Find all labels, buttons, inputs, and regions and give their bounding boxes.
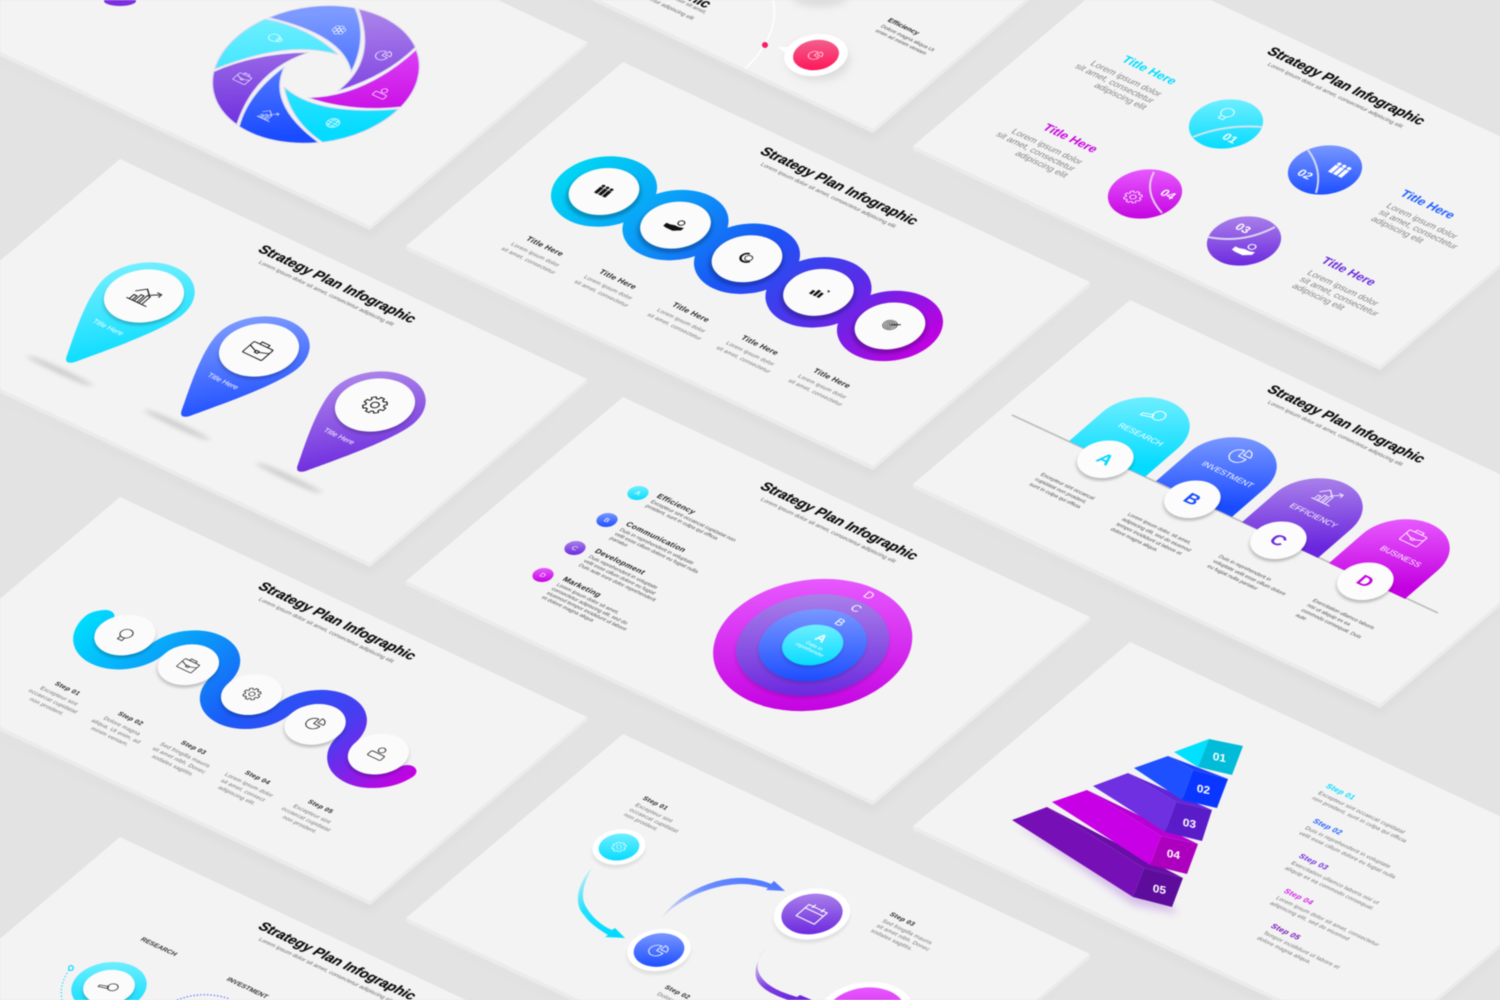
text: step 02: Duis in reprehenderit in voluptate <box>1303 826 1392 870</box>
text: D description: nisi ut aliquip ex ea <box>1305 603 1353 628</box>
panel: location pins slide (left) <box>0 159 587 573</box>
text: title 1: adipiscing elit <box>1092 81 1150 111</box>
text: step 05: non proident. <box>280 815 319 835</box>
text: column 2: Lorem ipsum dolor <box>582 275 634 301</box>
list dots <box>528 483 653 585</box>
text: step 03: Sed fringilla mauris <box>158 742 211 769</box>
text: title 4: Title Here <box>1039 122 1101 155</box>
arch D <box>1308 507 1470 617</box>
node 3 <box>755 879 869 953</box>
text: Efficiency: Dolore magna aliqua Ut <box>879 24 936 53</box>
pin 1: Title Here <box>90 317 126 337</box>
text: step 01: Excepteur sint occaecat cupidatat <box>1316 791 1406 835</box>
text: C description: voluptate velit esse cillum dolore <box>1211 559 1287 597</box>
text: step 02: Step 02 <box>116 711 145 727</box>
pyramid layer 01 <box>1174 739 1243 775</box>
text: step 01: Step 01 <box>1323 782 1358 801</box>
text: A description: cupidatat non proident, <box>1033 477 1088 505</box>
timeline curve <box>745 0 774 69</box>
ring labels: A <box>811 631 832 645</box>
text: step 02: minim veniam, <box>89 726 130 748</box>
text: step 04: Step 04 <box>243 770 272 786</box>
heading: Lorem ipsum dolor sit amet, consectetur adipiscing elit <box>758 162 897 229</box>
text: column 3: sit amet, consectetur <box>645 313 703 342</box>
text: column 3: Title Here <box>670 301 712 324</box>
arch B <box>1135 425 1297 535</box>
panel: aperture wheel slide (top left) <box>0 0 587 236</box>
node 4 <box>797 970 933 1000</box>
text: step 01: Excepteur sint <box>633 803 674 824</box>
pyramid layer 04 <box>1052 790 1198 874</box>
pin 2 <box>144 303 330 435</box>
circle 02: 02 <box>1294 167 1317 182</box>
text: Marketing: Lorem ipsum dolor sit amet, <box>554 583 621 616</box>
linked circle chain <box>529 143 965 375</box>
heading: Lorem ipsum dolor sit amet, consectetur adipiscing elit <box>1265 400 1404 467</box>
text: step 05: dolore magna aliqua. <box>1255 936 1313 965</box>
pin 2: Title Here <box>205 371 241 391</box>
pyramid layer 03: 03 <box>1182 817 1197 831</box>
panel: timeline slide (top centre) <box>406 0 1090 139</box>
circle 03: 03 <box>1232 221 1255 236</box>
text: title 2: Lorem ipsum dolor <box>1384 202 1460 241</box>
text: step 01: occaecat cupidatat <box>26 689 79 715</box>
aperture wheel chart <box>140 0 501 188</box>
text: B description: Lorem ipsum dolor, sit amet, <box>1125 512 1193 546</box>
panel: concentric circles slide (lower centre) <box>406 397 1090 811</box>
text: title 3: Title Here <box>1318 255 1380 288</box>
dotted arc: blue <box>177 995 230 1000</box>
label: investment: INVESTMENT <box>224 977 270 1000</box>
heading: Lorem ipsum dolor sit amet, consectetur adipiscing elit <box>1265 62 1404 129</box>
text: Communication: Communication <box>623 520 689 554</box>
text: step 03: Step 03 <box>887 912 917 927</box>
text: step 04: adipiscing elit. <box>216 786 257 807</box>
text: B description: tempor incididunt ut labore et <box>1114 522 1183 557</box>
text: title 1: Title Here <box>1118 54 1180 87</box>
heading: Strategy Plan Infographic <box>756 145 922 228</box>
text: step 01: Step 01 <box>53 681 82 697</box>
text: Development: Development <box>592 547 648 576</box>
text: title 3: sit amet, consectetur <box>1297 275 1382 318</box>
text: step 03: sit amet nibh. Donec <box>150 747 207 775</box>
pin shadows <box>25 354 324 495</box>
arrow 3 <box>756 942 812 1000</box>
arch D: D <box>1352 572 1379 591</box>
text: Development: Duis aute irure dolor reprehenderit <box>577 563 657 603</box>
text: title 2: adipiscing elit <box>1369 215 1427 245</box>
text: step 03: Sed fringilla mauris <box>880 919 933 946</box>
text: B description: dolore magna aliqua. <box>1109 527 1160 553</box>
text: Efficiency: Efficiency <box>885 18 921 36</box>
text: Marketing: eiusmod tempor incididunt ut labore <box>545 591 628 632</box>
dotted arc: cyan <box>61 966 73 1000</box>
circle 04: 04 <box>1157 187 1180 202</box>
heading: Lorem ipsum dolor sit amet, consectetur adipiscing elit <box>256 260 395 327</box>
text: step 04: Lorem ipsum dolor sit amet, consectetur <box>1274 896 1380 948</box>
text: Development: Duis reprehenderit in voluptate <box>586 555 659 590</box>
arch A: A <box>1092 450 1119 469</box>
arch A: RESEARCH <box>1116 421 1166 448</box>
text: step 04: Step 04 <box>1281 887 1316 906</box>
panel: pyramid slide (lower right) <box>913 642 1500 1000</box>
text: step 04: Lorem ipsum dolor <box>223 773 274 799</box>
pyramid layer 01: 01 <box>1212 751 1227 765</box>
heading: Lorem ipsum dolor sit amet, consectetur adipiscing elit <box>256 597 395 664</box>
text: step 04: adipiscing elit, sed do eiusmod <box>1268 901 1351 942</box>
pin 3: Title Here <box>321 426 357 446</box>
concentric circle chart <box>672 554 953 736</box>
panel: five linked circles slide (centre) <box>406 62 1090 476</box>
arch B: INVESTMENT <box>1199 459 1256 489</box>
text: title 3: Lorem ipsum dolor <box>1305 269 1381 308</box>
cropped white node <box>792 0 848 7</box>
text: column 4: Lorem ipsum dolor <box>724 341 776 367</box>
text: Communication: velit esse cillum dolore eu fugiat nulla <box>613 532 700 575</box>
ring labels: C <box>847 602 866 615</box>
list dots: B <box>601 517 611 524</box>
panel: research cycle slide (bottom left) <box>0 837 587 1000</box>
arch B: B <box>1179 490 1206 509</box>
heading <box>549 0 715 21</box>
text: title 4: adipiscing elit <box>1013 149 1071 179</box>
ring labels <box>793 589 879 659</box>
pyramid shadow <box>1016 824 1178 914</box>
text: Communication: pariatur. <box>608 536 631 549</box>
text: title 4: Lorem ipsum dolor <box>1009 127 1085 166</box>
arrow 2 <box>660 878 785 920</box>
research node <box>56 952 162 1000</box>
pyramid layer 02: 02 <box>1196 783 1211 797</box>
slide base <box>0 159 587 573</box>
text: title 1: Lorem ipsum dolor <box>1088 59 1164 98</box>
heading: Strategy Plan Infographic <box>254 243 420 326</box>
heading: Strategy Plan Infographic <box>756 480 922 563</box>
text: title 3: adipiscing elit <box>1290 282 1348 312</box>
arch C: EFFICIENCY <box>1287 501 1341 530</box>
baseline rule <box>1012 415 1438 613</box>
text: column 3: Lorem ipsum dolor <box>655 308 707 334</box>
wave ribbon with step discs <box>67 597 436 792</box>
text: column 5: Title Here <box>811 367 853 390</box>
text: step 01: occaecat cupidatat <box>627 808 680 834</box>
heading: Strategy Plan Infographic <box>254 580 420 663</box>
text: column 5: Lorem ipsum dolor <box>796 374 848 400</box>
text: step 03: sit amet nibh. Donec <box>874 924 931 952</box>
text: step 03: Step 03 <box>179 740 208 756</box>
ring labels: Data in <box>804 641 824 652</box>
text: column 2: sit amet, consectetur <box>572 280 630 309</box>
text: step 01: non proident, sunt in culpa qui officia <box>1310 796 1408 844</box>
wave icons <box>115 628 391 761</box>
slide base <box>406 734 1090 1000</box>
text: step 03: aliquip ex ea commodo consequat. <box>1283 866 1376 912</box>
text: Efficiency: enim ad minim veniam <box>873 29 928 56</box>
text: column 1: Lorem ipsum dolor <box>509 242 561 268</box>
arch C: C <box>1265 531 1292 550</box>
text: step 02: aliqua. Ut enim, ad <box>89 719 142 745</box>
text: B description: adipiscing elit, sed do eiusmod <box>1120 517 1192 553</box>
text: step 05: Step 05 <box>306 799 335 815</box>
circle 03 <box>1192 207 1296 275</box>
list dots: A <box>632 490 642 497</box>
text: D description: Exercitation ullamco laboris <box>1310 598 1376 631</box>
text: step 01: Excepteur sint <box>38 686 79 707</box>
text: column 2: Title Here <box>597 268 639 291</box>
text: A description: Excepteur sint occaecat <box>1038 472 1096 501</box>
text: column 1: Title Here <box>524 235 566 258</box>
label: research: RESEARCH <box>138 937 178 958</box>
text: Marketing: consectetur adipiscing elit, sed do <box>550 587 629 626</box>
pyramid layer 04: 04 <box>1166 848 1181 862</box>
chain icons <box>594 184 901 332</box>
text: Marketing: et dolore magna aliqua <box>540 595 596 624</box>
circle 01 <box>1174 90 1278 158</box>
text: title 2: Title Here <box>1397 188 1459 221</box>
panel: flow arrows slide (bottom centre) <box>406 734 1090 1000</box>
text: Communication: Duis in reprehenderit in voluptate <box>617 528 695 566</box>
text: step 05: Excepteur sint <box>291 804 332 825</box>
text: title 4: sit amet, consectetur <box>994 130 1078 173</box>
timeline dot <box>762 42 768 48</box>
text: C description: eu fugiat nulla pariatur <box>1205 564 1259 591</box>
arch C <box>1221 466 1383 576</box>
text: Efficiency: Excepteur sint occaecat cupidatat non <box>648 500 737 543</box>
pin 3 <box>260 358 446 490</box>
circle 01: 01 <box>1219 131 1242 146</box>
slide base <box>406 0 1090 139</box>
slide base <box>0 0 587 236</box>
pyramid layer 05 <box>1012 807 1183 907</box>
text: D description: commodo consequat. Duis <box>1299 608 1363 640</box>
slide base <box>0 837 587 1000</box>
wheel icons <box>232 24 394 129</box>
node 2 <box>611 921 707 983</box>
pyramid layer 05: 05 <box>1152 883 1167 897</box>
text: step 01: Step 01 <box>640 796 670 811</box>
pin 1 <box>29 249 215 381</box>
text: step 04: sit amet, consect <box>219 779 266 803</box>
text: step 03: sodales sagittis. <box>150 754 195 778</box>
text: step 05: Tempor incididunt ut labore et <box>1261 931 1341 970</box>
text: step 05: Step 05 <box>1268 922 1303 941</box>
list dots: C <box>569 545 579 552</box>
text: title 2: sit amet, consectetur <box>1376 208 1461 251</box>
cropped purple element at slide edge <box>104 0 136 6</box>
pyramid layer 03 <box>1093 773 1212 841</box>
circle 04 <box>1093 160 1197 228</box>
text: step 01: non proident. <box>27 697 66 717</box>
slide base <box>913 642 1500 1000</box>
text: Efficiency: proident, sunt in culpa qui officia <box>644 504 720 542</box>
slide base <box>406 62 1090 476</box>
panel: arches A-D slide (middle right) <box>913 300 1500 714</box>
arch A <box>1048 385 1210 495</box>
panel: wave slide (lower left) <box>0 497 587 911</box>
text: C description: Duis in reprehenderit in <box>1216 554 1272 583</box>
arrow 1 <box>578 868 625 938</box>
text: step 03: Step 03 <box>1296 852 1331 871</box>
pyramid layer 02 <box>1134 756 1228 808</box>
heading: Lorem ipsum dolor sit amet, consectetur adipiscing elit <box>758 497 897 564</box>
text: Development: velit esse cillum dolore eu fugiat <box>582 559 657 596</box>
ring labels: D <box>860 589 879 602</box>
text: Marketing: Marketing <box>560 575 604 599</box>
text: title 1: sit amet, consectetur <box>1073 62 1157 105</box>
text: A description: sunt in culpa qui officia <box>1027 482 1083 510</box>
arch D: BUSINESS <box>1378 544 1424 569</box>
slide base <box>913 300 1500 714</box>
ring labels: reprehender <box>793 642 825 659</box>
text: column 5: sit amet, consectetur <box>786 379 844 408</box>
slide base <box>0 497 587 911</box>
circle 02 <box>1273 136 1377 204</box>
text: step 03: Exercitation ullamco laboris nisi ut <box>1289 861 1380 906</box>
slide base <box>406 397 1090 811</box>
text: step 02: Dolore magna <box>101 716 142 737</box>
text: step 05: occaecat cupidatat <box>279 807 332 833</box>
heading: Strategy Plan Infographic <box>1263 45 1429 128</box>
text: D description: aute <box>1294 613 1308 622</box>
pink node with pointer <box>771 26 861 84</box>
text: step 02: velit esse cillum dolore eu fugiat nulla <box>1297 831 1397 880</box>
text: step 02: Step 02 <box>1310 817 1345 836</box>
text: column 1: sit amet, consectetur <box>499 247 557 276</box>
list dots: D <box>537 572 547 579</box>
heading: Strategy Plan Infographic <box>1263 383 1429 466</box>
text: column 4: Title Here <box>739 334 781 357</box>
panel: four circles slide (upper right) <box>913 0 1500 376</box>
text: step 03: sodales sagittis. <box>869 929 914 952</box>
heading: Lorem ipsum dolor sit amet, consectetur adipiscing elit <box>256 937 395 1000</box>
node 1 <box>578 823 659 875</box>
ring labels: B <box>831 616 849 629</box>
text: step 01: non proident. <box>622 813 660 833</box>
text: Efficiency: Efficiency <box>654 492 698 516</box>
text: column 4: sit amet, consectetur <box>714 346 772 375</box>
slide base <box>913 0 1500 376</box>
